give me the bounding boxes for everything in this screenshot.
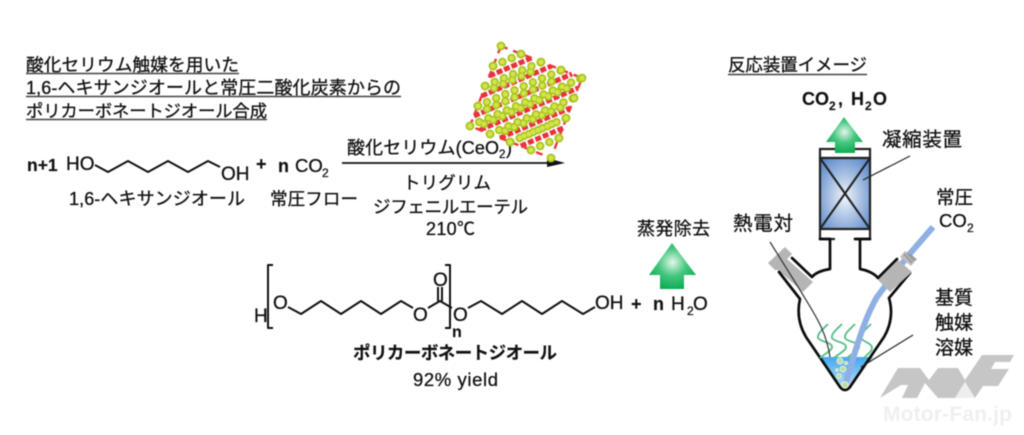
reaction arrow with conditions: 酸化セリウム(CeO: [347, 138, 499, 158]
byproduct: water: n: [653, 294, 664, 314]
logo: Motor-Fan watermark: Motor-Fan.jp: [883, 403, 1012, 426]
reactant: carbon dioxide: 2: [322, 166, 329, 180]
bubbles: [836, 358, 848, 388]
catalyst: cerium oxide crystal: [466, 42, 586, 162]
title: synthesis heading: ポリカーボネートジオール合成: [26, 101, 267, 121]
title: synthesis heading: 1,6-ヘキサンジオールと常圧二酸化炭素からの: [26, 78, 401, 98]
right stopper: [878, 260, 912, 292]
reaction arrow with conditions: ): [506, 138, 512, 158]
reactant: carbon dioxide: n: [278, 156, 289, 176]
reaction arrow with conditions: トリグリム: [403, 173, 491, 193]
product: polycarbonate diol structure: +: [631, 294, 642, 314]
product: polycarbonate diol structure: ポリカーボネートジオール: [353, 343, 557, 363]
title: synthesis heading: [26, 55, 401, 121]
label: atmospheric CO2: CO: [939, 210, 967, 231]
reactant: 1,6-hexanediol: HO: [66, 154, 94, 175]
reactant: carbon dioxide: [256, 154, 358, 209]
label: substrate, catalyst, solvent: [935, 287, 973, 359]
label: substrate, catalyst, solvent: 基質: [935, 287, 973, 309]
green vapour waves: [818, 324, 872, 358]
byproduct: water: 2: [687, 304, 694, 318]
leader line: condenser: [863, 156, 910, 180]
label: CO2 and H2O outlet: [802, 89, 887, 113]
reactant: carbon dioxide: +: [256, 154, 267, 174]
apparatus: flask: [768, 227, 933, 391]
label: substrate, catalyst, solvent: 溶媒: [935, 337, 973, 359]
reaction arrow with conditions: 210℃: [426, 219, 475, 239]
product: polycarbonate diol structure: H: [254, 306, 268, 327]
icon: green up arrow for evaporation: [649, 243, 696, 289]
product: polycarbonate diol structure: OH: [595, 293, 624, 314]
thermocouple wire: [770, 242, 830, 357]
label: evaporation removal: 蒸発除去: [637, 219, 710, 239]
reactant: 1,6-hexanediol: n+1: [27, 155, 58, 175]
reaction arrow with conditions: 2: [499, 149, 505, 161]
label: CO2 and H2O outlet: H: [851, 89, 864, 109]
logo: Motor-Fan watermark: [880, 355, 1014, 426]
leader line: contents: [861, 335, 913, 367]
label: atmospheric CO2: [936, 187, 974, 235]
label: CO2 and H2O outlet: CO: [802, 89, 829, 109]
reactant: carbon dioxide: CO: [295, 155, 323, 176]
heading: apparatus image: 反応装置イメージ: [728, 55, 867, 75]
label: CO2 and H2O outlet: 2: [865, 99, 872, 113]
product: polycarbonate diol structure: O: [413, 305, 428, 326]
reaction arrow with conditions: ジフェニルエーテル: [373, 197, 528, 217]
label: condenser: 凝縮装置: [882, 129, 962, 151]
product: polycarbonate diol structure: [254, 265, 642, 390]
reactant: 1,6-hexanediol: 1,6-ヘキサンジオール: [69, 189, 245, 209]
label: CO2 and H2O outlet: 2: [829, 99, 836, 113]
reaction arrow with conditions: [342, 138, 565, 239]
byproduct: water: H: [671, 294, 685, 315]
product: polycarbonate diol structure: O: [433, 270, 448, 291]
apparatus: condenser: [820, 149, 870, 239]
label: atmospheric CO2: 常圧: [936, 187, 973, 208]
product: polycarbonate diol structure: O: [453, 305, 468, 326]
gas tube: [845, 227, 933, 386]
product: polycarbonate diol structure: n: [452, 324, 462, 341]
reactant: carbon dioxide: 常圧フロー: [270, 189, 358, 209]
title: synthesis heading: 酸化セリウム触媒を用いた: [26, 55, 239, 75]
icon: green up arrow above condenser: [826, 117, 863, 153]
byproduct: water: [653, 294, 708, 318]
reactant: 1,6-hexanediol: [27, 154, 250, 209]
label: CO2 and H2O outlet: ,: [838, 89, 843, 109]
label: CO2 and H2O outlet: O: [873, 89, 887, 109]
product: polycarbonate diol structure: 92% yield: [413, 369, 498, 390]
label: substrate, catalyst, solvent: 触媒: [935, 312, 973, 334]
product: polycarbonate diol structure: O: [273, 293, 288, 314]
left stopper: [768, 247, 813, 292]
label: thermocouple: 熱電対: [733, 213, 793, 235]
reactant: 1,6-hexanediol: OH: [221, 164, 250, 185]
byproduct: water: O: [693, 294, 708, 315]
flask outline: [792, 239, 830, 277]
label: atmospheric CO2: 2: [967, 221, 974, 235]
